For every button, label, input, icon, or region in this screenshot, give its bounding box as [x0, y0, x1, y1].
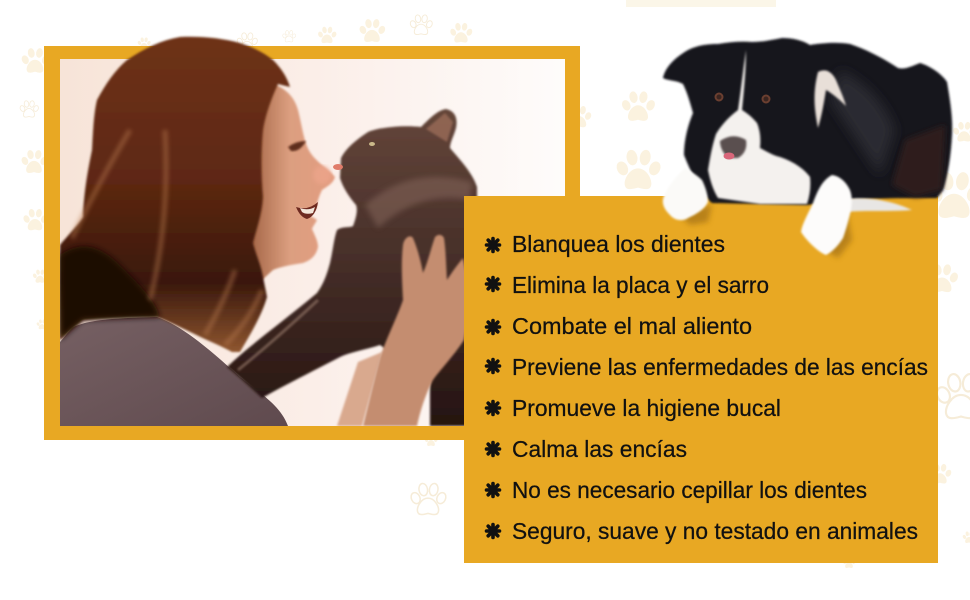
benefit 6: Calma las encías: [512, 436, 687, 462]
dog tail: [847, 198, 912, 212]
benefit 3: Combate el mal aliento: [512, 313, 752, 339]
dog photo: [663, 38, 952, 258]
cat's arm highlight: [238, 300, 318, 370]
cat's tongue: [333, 164, 343, 170]
woman's shirt: [60, 317, 288, 426]
dog brown rear: [892, 125, 945, 197]
yellow photo frame: [44, 46, 580, 440]
photo: woman and cat: [60, 37, 565, 426]
cat: [227, 109, 478, 426]
benefit 5: Promueve la higiene bucal: [512, 395, 781, 421]
woman's face: [252, 84, 336, 280]
dog body: [663, 38, 952, 205]
right paw: [801, 175, 852, 255]
nose: [720, 136, 746, 158]
benefit 8: Seguro, suave y no testado en animales: [512, 518, 918, 544]
left paw: [663, 168, 708, 220]
yellow benefits panel: [464, 196, 938, 563]
cat's far arm: [337, 352, 382, 426]
dog blaze and chest: [708, 50, 810, 204]
benefits list: [486, 231, 928, 544]
cat's ear light: [426, 113, 453, 142]
nose highlight: [313, 166, 331, 184]
tongue: [724, 152, 734, 160]
woman's hair: [60, 37, 290, 352]
eyes: [716, 94, 770, 102]
woman's hand: [363, 235, 472, 426]
benefit 2: Elimina la placa y el sarro: [512, 272, 769, 298]
teeth: [300, 207, 315, 214]
hair highlights: [72, 130, 262, 345]
smile: [296, 202, 318, 219]
woman's eye: [288, 141, 306, 151]
cat's eye: [369, 142, 375, 146]
neck patch: [815, 70, 846, 128]
photo background: [60, 59, 565, 426]
paw shadows: [680, 204, 852, 258]
dog body sheen: [830, 70, 895, 175]
benefit 4: Previene las enfermedades de las encías: [512, 354, 928, 380]
hair shadow: [60, 246, 160, 340]
cat fur light: [365, 177, 472, 228]
benefit 1: Blanquea los dientes: [512, 231, 725, 257]
benefit 7: No es necesario cepillar los dientes: [512, 477, 867, 503]
